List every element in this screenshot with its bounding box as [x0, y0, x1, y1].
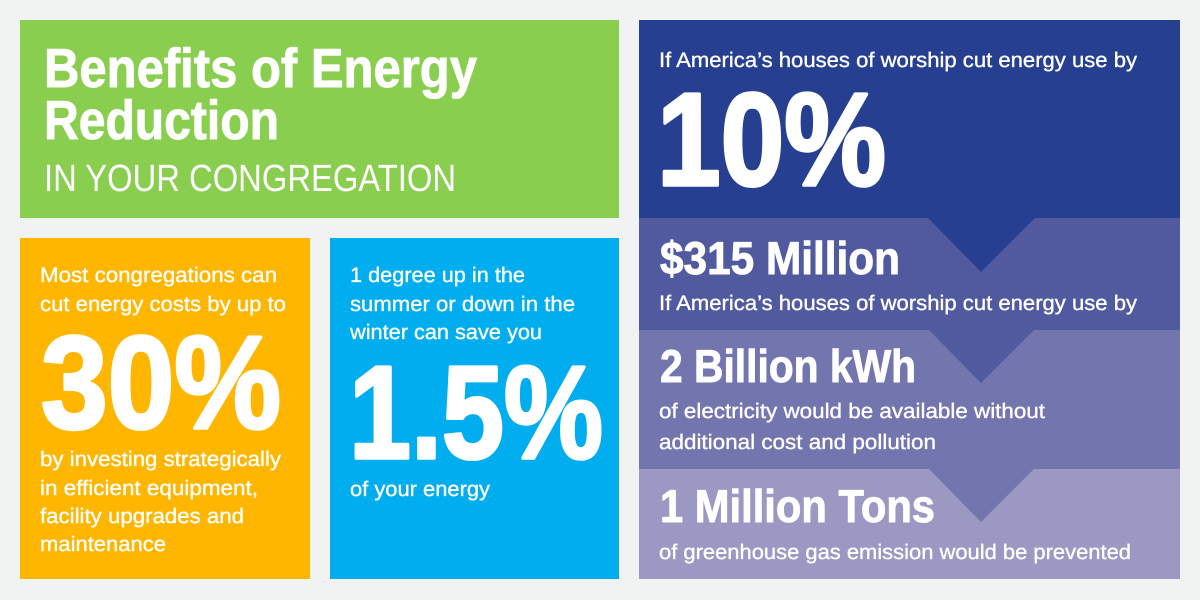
subheading: IN YOUR CONGREGATION [44, 158, 456, 200]
heading: benefits of energy reduction: Benefits of Energy [44, 37, 477, 99]
heading: benefits of energy reduction: Reduction [44, 89, 279, 151]
band: 2 billion kwh: of electricity would be available without [659, 400, 1045, 423]
arrow: chevron from $315 million band [929, 330, 1034, 383]
band: $315 million: $315 Million [660, 232, 900, 284]
band: 10%: If America’s houses of worship cut energy use by [659, 49, 1138, 72]
band: $315 million [639, 218, 1180, 330]
panel: cut energy costs 30% [20, 238, 310, 579]
big number: 1.5%: 1.5% [349, 339, 603, 486]
heading: benefits of energy reduction [44, 37, 477, 151]
text: of your energy: of your energy [350, 478, 491, 501]
band: 1 million tons: of greenhouse gas emission would be prevented [659, 541, 1131, 564]
band: 2 billion kwh: 2 Billion kWh [660, 340, 916, 392]
text: 1 degree up: winter can save you [349, 321, 542, 344]
text: 1 degree up: summer or down in the [350, 293, 575, 316]
text: most congregations: cut energy costs by up to [40, 293, 286, 316]
band: 1 million tons: 1 Million Tons [660, 480, 935, 532]
band: 10% [639, 20, 1180, 218]
panel: thermostat 1.5% [330, 238, 619, 579]
band: $315 million: If America’s houses of worship cut energy use by [659, 292, 1138, 315]
text: most congregations [40, 264, 286, 316]
text: by investing strategically: by investing strategically [40, 448, 282, 471]
text: by investing strategically: facility upgrades and [40, 505, 244, 528]
band: 2 billion kwh: additional cost and pollution [659, 431, 936, 454]
band: 2 billion kwh [639, 330, 1180, 469]
arrow: chevron from 10% band [928, 218, 1035, 272]
text: by investing strategically [40, 448, 282, 556]
big number: 30%: 30% [41, 309, 281, 456]
arrow: chevron from 2 billion band [929, 469, 1034, 522]
text: 1 degree up [349, 264, 575, 344]
panel: title [20, 20, 619, 218]
text: by investing strategically: in efficient equipment, [40, 477, 258, 500]
panel: national impact funnel [639, 20, 1180, 579]
text: 1 degree up: 1 degree up in the [350, 264, 525, 287]
big number: 10%: 10% [657, 66, 886, 213]
text: most congregations: Most congregations can [40, 264, 277, 287]
band: 1 million tons [639, 469, 1180, 579]
text: by investing strategically: maintenance [40, 533, 166, 556]
